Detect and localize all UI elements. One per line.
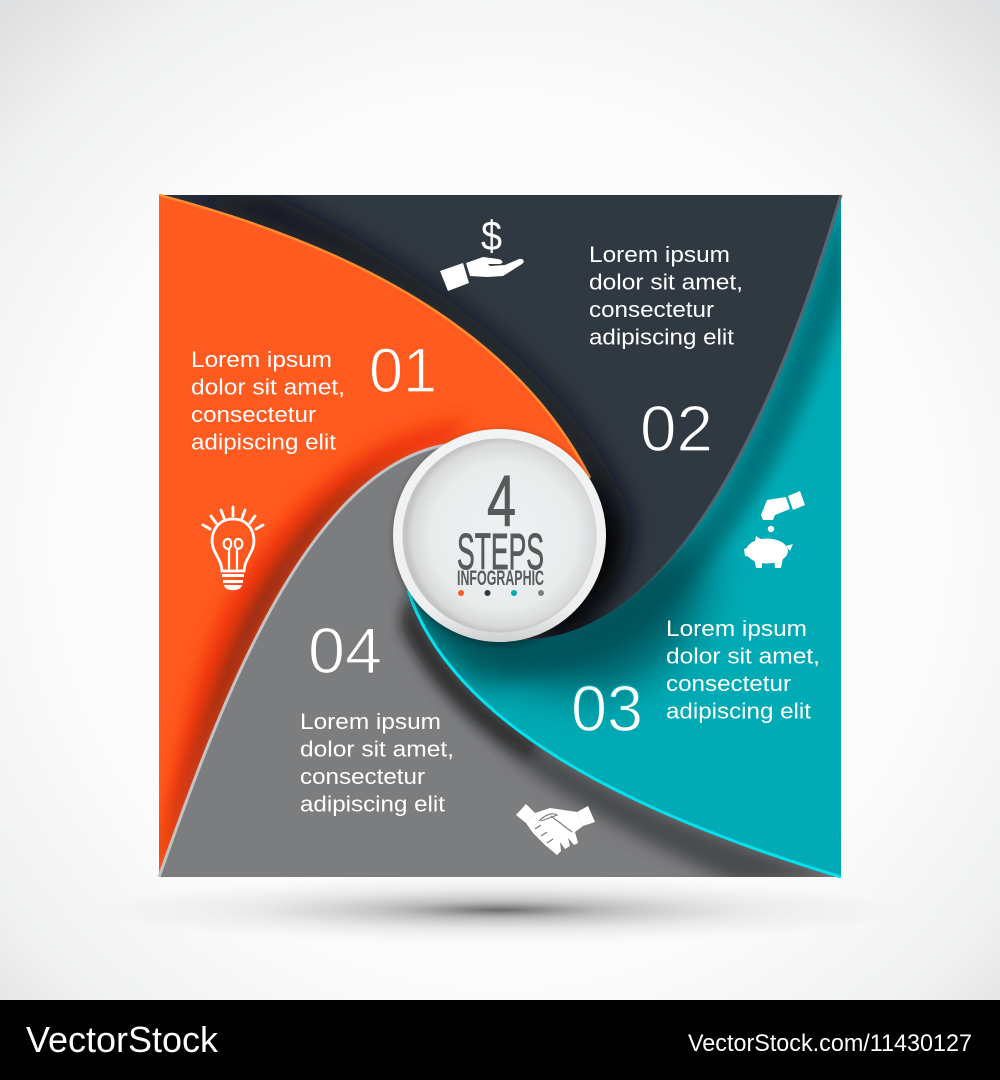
text block 03 — [666, 616, 820, 724]
text block 04: Lorem ipsum — [300, 709, 441, 734]
text block 04 — [300, 709, 454, 816]
icon: light bulb — [203, 507, 263, 590]
text block 02: Lorem ipsum — [589, 242, 730, 267]
outer ring — [393, 429, 606, 642]
icon: piggy bank and hand — [744, 491, 805, 568]
blade edge highlights — [159, 195, 841, 877]
panel: gray step 04 — [159, 445, 841, 885]
text block 01: adipiscing elit — [191, 430, 337, 454]
image URL: VectorStock.com/11430127 — [688, 1030, 972, 1057]
icon: handshake — [516, 804, 595, 855]
text block 02: adipiscing elit — [589, 324, 735, 350]
text block 03: adipiscing elit — [666, 698, 812, 724]
VectorStock logo: VectorStock — [26, 1019, 219, 1060]
text block 03: consectetur — [666, 671, 792, 696]
step number 02: 02 — [640, 392, 713, 465]
text block 04: dolor sit amet, — [300, 736, 454, 762]
text block 01: consectetur — [191, 402, 317, 427]
text block 02: consectetur — [589, 297, 715, 322]
panel: orange step 01 — [159, 195, 590, 877]
color dots — [458, 590, 544, 596]
step number 01: 01 — [369, 336, 437, 406]
panel: dark step 02 — [159, 195, 841, 650]
INFOGRAPHIC label: INFOGRAPHIC — [457, 567, 544, 590]
step number 03: 03 — [571, 672, 643, 745]
footer band — [0, 1000, 1000, 1080]
icon: hand with dollar — [440, 212, 524, 291]
text block 04: consectetur — [300, 764, 426, 789]
icon: hand with dollar: $ — [481, 212, 502, 259]
text block 01: dolor sit amet, — [191, 374, 345, 400]
panel: teal step 03 — [400, 195, 850, 877]
text block 01 — [191, 347, 345, 454]
circle shadow — [392, 430, 608, 646]
inner disc — [402, 438, 596, 632]
center circle badge — [392, 429, 608, 646]
text block 03: dolor sit amet, — [666, 644, 820, 668]
text block 04: adipiscing elit — [300, 792, 446, 816]
ground shadow — [90, 876, 910, 944]
numeral 4: 4 — [487, 462, 516, 542]
text block 03: Lorem ipsum — [666, 616, 807, 641]
text block 02: dolor sit amet, — [589, 270, 743, 294]
square swirl diagram — [159, 195, 850, 885]
text block 02 — [589, 242, 743, 350]
step number 04: 04 — [308, 614, 382, 687]
STEPS label: STEPS — [457, 523, 544, 580]
text block 01: Lorem ipsum — [191, 347, 332, 372]
